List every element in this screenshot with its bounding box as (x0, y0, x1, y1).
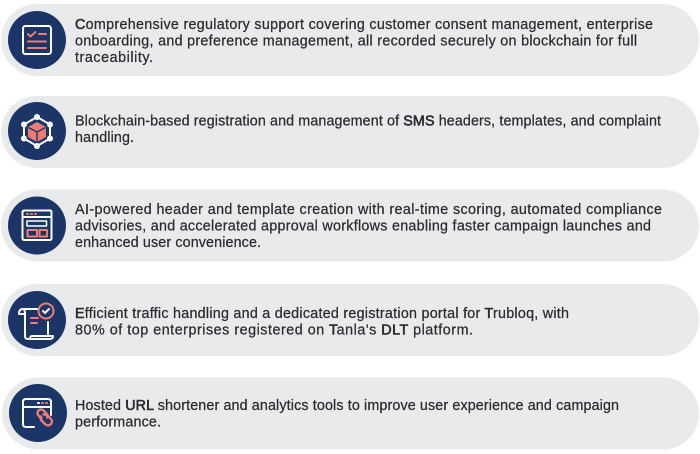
text: URL shortener: Hosted URL shortener and analytics tools to improve user experience and campaign (75, 398, 619, 414)
text: consent management: onboarding, and preference management, all recorded securely on blockchain for full (75, 34, 637, 50)
text: blockchain registration: Blockchain-based registration and management of SMS headers, templates, and complaint (75, 114, 661, 130)
panel: consent management (1, 4, 699, 76)
text: consent management: Comprehensive regulatory support covering customer consent management, enterprise (75, 17, 653, 33)
icon: blockchain cube (8, 102, 66, 160)
text: URL shortener: performance. (75, 414, 161, 430)
text: traffic handling (75, 306, 569, 338)
text: AI-powered creation (75, 202, 662, 251)
text: AI-powered creation: enhanced user convenience. (75, 235, 261, 251)
text: traffic handling: Efficient traffic handling and a dedicated registration portal for Trubloq, with (75, 306, 569, 322)
text: consent management (75, 17, 653, 66)
text: blockchain registration: handling. (75, 130, 134, 146)
icon: browser with link (9, 384, 67, 442)
text: AI-powered creation: AI-powered header and template creation with real-time scoring, automated compliance (75, 202, 662, 218)
icon: scroll with check (8, 291, 66, 349)
panel: AI-powered creation (1, 190, 699, 262)
panel: traffic handling (1, 284, 699, 356)
icon: checklist (8, 11, 66, 69)
icon: browser layout (8, 196, 66, 254)
text: blockchain registration (75, 114, 661, 146)
panel: URL shortener (2, 378, 699, 450)
text: traffic handling: 80% of top enterprises registered on Tanla's DLT platform. (75, 322, 473, 338)
text: AI-powered creation: advisories, and accelerated approval workflows enabling faster campaign launches and (75, 218, 651, 234)
panel: blockchain registration (1, 96, 699, 168)
text: URL shortener (75, 398, 619, 430)
text: consent management: traceability. (75, 50, 153, 66)
